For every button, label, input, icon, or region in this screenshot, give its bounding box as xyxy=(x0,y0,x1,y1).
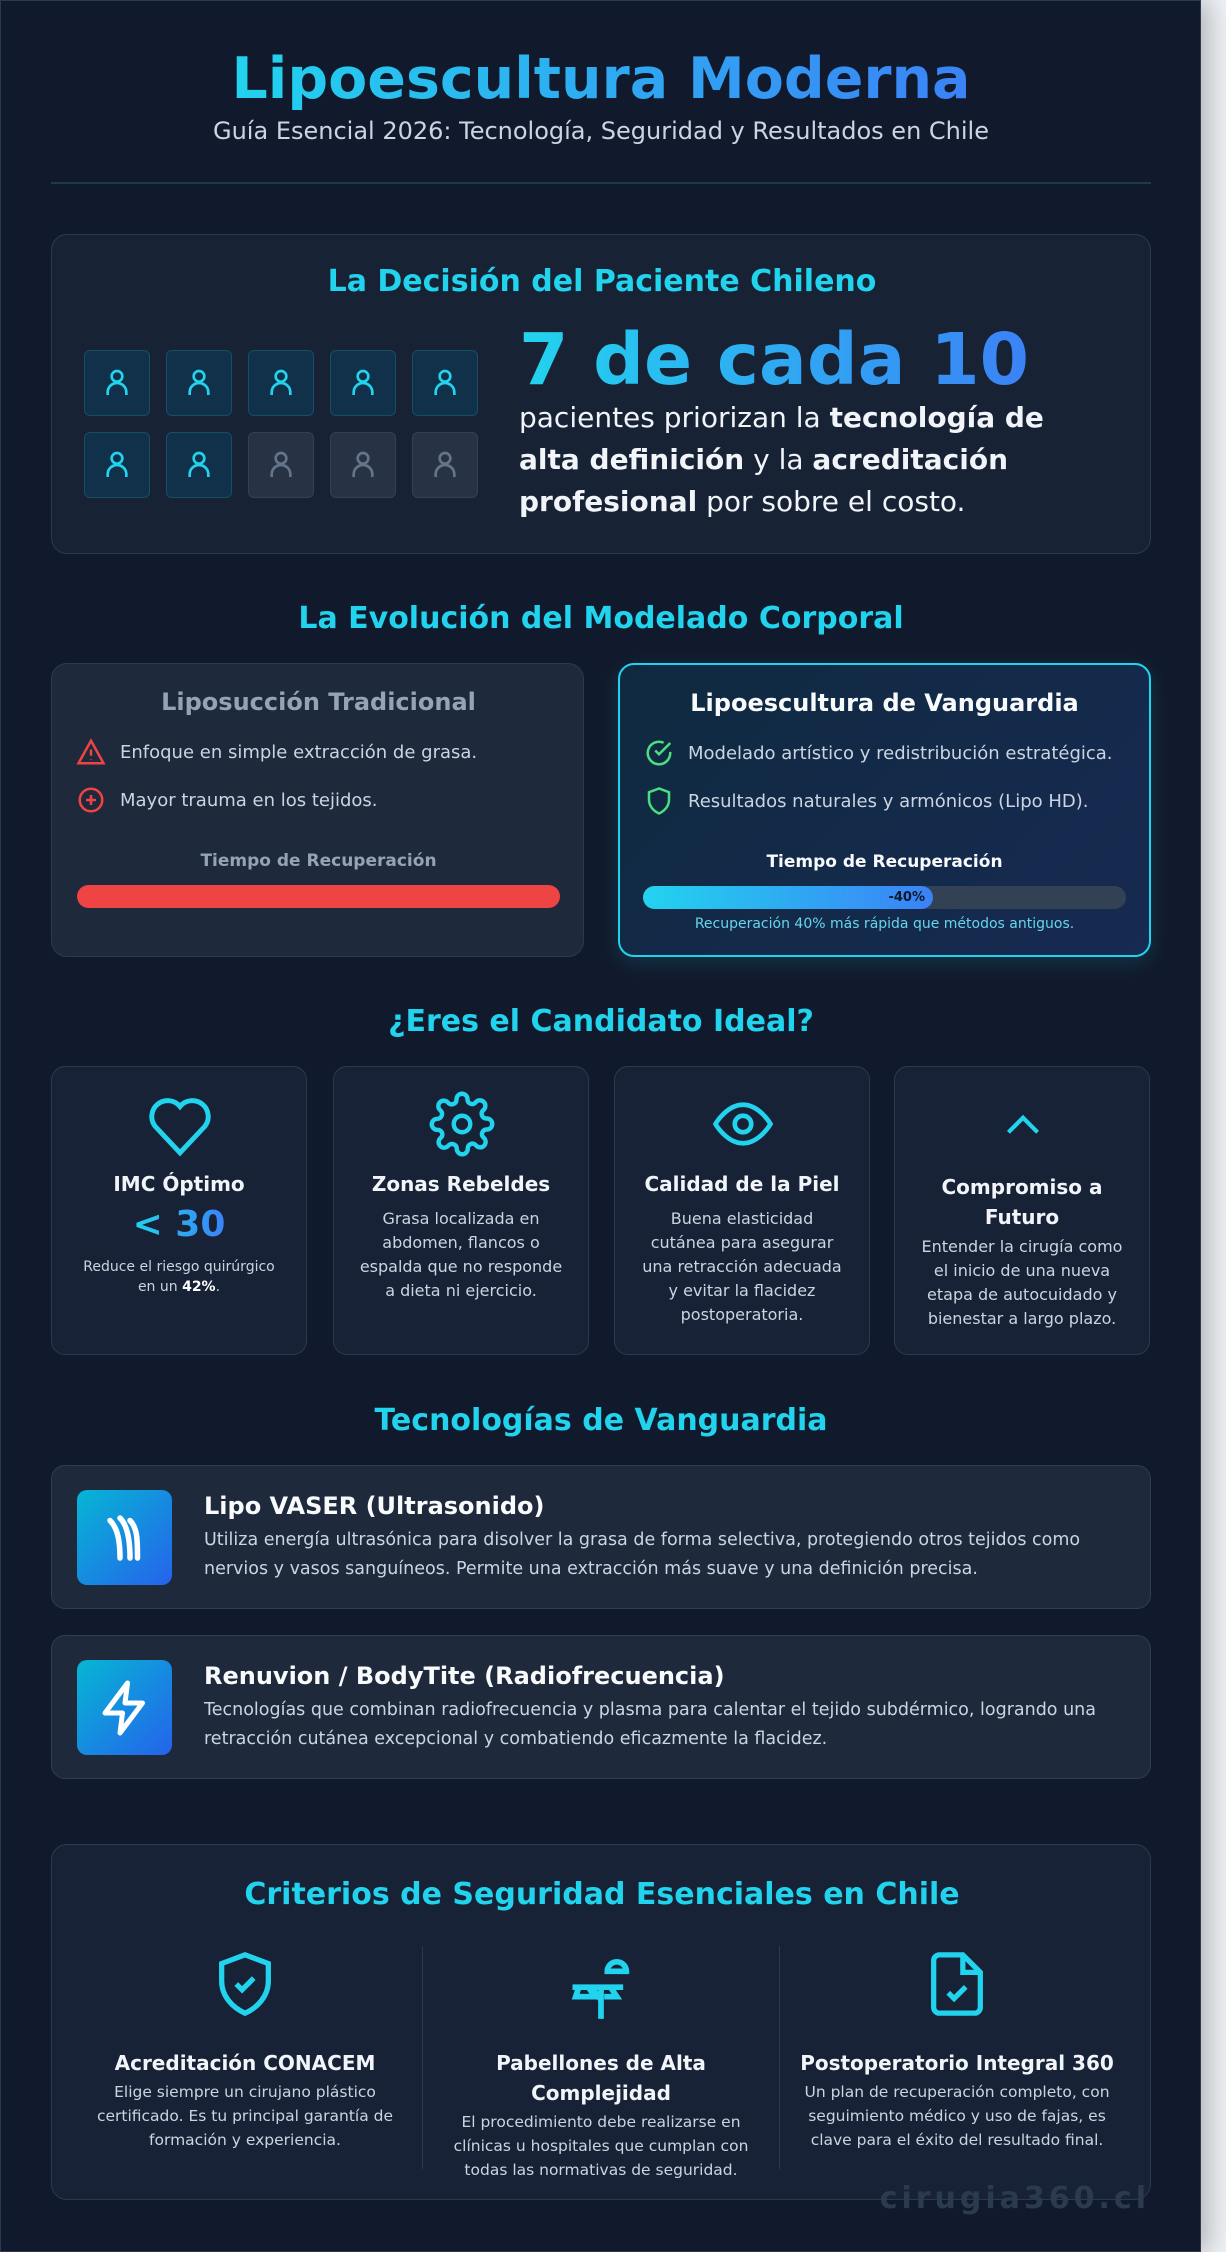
card: skin xyxy=(614,1066,870,1355)
tech card: Renuvion xyxy=(51,1635,1151,1779)
card: skin: Calidad de la Piel xyxy=(644,1172,840,1196)
heading: candidate: ¿Eres el Candidato Ideal? xyxy=(388,1004,814,1039)
heading: technologies: Tecnologías de Vanguardia xyxy=(374,1403,828,1438)
tech card: Renuvion: Renuvion / BodyTite (Radiofrecuencia) xyxy=(204,1662,725,1690)
card title: Lipoescultura de Vanguardia xyxy=(690,689,1079,717)
icon: heart xyxy=(149,1098,211,1156)
column: postoperatorio: Un plan de recuperación completo, con seguimiento médico y uso de fajas, es clave para el éxito del resultado final. xyxy=(804,2083,1110,2149)
icon: document check xyxy=(931,1952,983,2016)
card: commitment: Compromiso a Futuro xyxy=(942,1175,1102,1229)
panel: decision xyxy=(51,234,1151,554)
icon: gear xyxy=(430,1092,494,1156)
item: trauma: Mayor trauma en los tejidos. xyxy=(120,790,378,810)
card title: Liposucción Tradicional xyxy=(161,688,476,716)
column: CONACEM: Elige siempre un cirujano plástico certificado. Es tu principal garantía de formación y experiencia. xyxy=(97,2083,393,2149)
card: IMC: Reduce el riesgo quirúrgico en un 42%. xyxy=(83,1259,275,1295)
card: IMC xyxy=(51,1066,307,1355)
column: CONACEM xyxy=(97,1952,393,2149)
card: zones: Grasa localizada en abdomen, flancos o espalda que no responde a dieta ni ejercicio. xyxy=(360,1209,562,1300)
tech card: VASER: Utiliza energía ultrasónica para disolver la grasa de forma selectiva, protegiendo otros tejidos como nervios y vasos sanguíneos. Permite una extracción más suave y una definición precisa. xyxy=(204,1530,1080,1579)
stat text: pacientes priorizan la tecnología de alta definición y la acreditación profesional por sobre el costo. xyxy=(519,401,1044,518)
icon: surgical lamp xyxy=(572,1959,630,2019)
bar: -40% xyxy=(643,886,1126,909)
card: zones: Zonas Rebeldes xyxy=(372,1172,550,1196)
big stat: 7 de cada 10 xyxy=(519,318,1029,401)
column: postoperatorio xyxy=(800,1952,1114,2149)
title: Lipoescultura Moderna xyxy=(231,46,971,112)
icon: eye xyxy=(712,1102,774,1146)
panel: traditional xyxy=(51,663,584,957)
panel: vanguard xyxy=(618,663,1151,957)
tech card: VASER xyxy=(51,1465,1151,1609)
subtitle: Guía Esencial 2026: Tecnología, Seguridad y Resultados en Chile xyxy=(213,117,989,145)
heading: evolution: La Evolución del Modelado Corporal xyxy=(298,601,904,636)
column: pabellones: El procedimiento debe realizarse en clínicas u hospitales que cumplan con todas las normativas de seguridad. xyxy=(454,2113,748,2179)
icon: chevron up xyxy=(1007,1114,1039,1134)
heading: decision: La Decisión del Paciente Chileno xyxy=(328,264,876,299)
icon: shield check xyxy=(219,1952,271,2016)
item: modeling: Modelado artístico y redistribución estratégica. xyxy=(688,742,1113,764)
icon: lightning xyxy=(77,1660,172,1755)
column: postoperatorio: Postoperatorio Integral 360 xyxy=(800,2051,1114,2075)
column: CONACEM: Acreditación CONACEM xyxy=(115,2051,375,2075)
card: IMC: IMC Óptimo xyxy=(113,1172,245,1196)
icon: waves xyxy=(77,1490,172,1585)
icon grid: 7 of 10 xyxy=(84,350,478,498)
tech card: Renuvion: Tecnologías que combinan radiofrecuencia y plasma para calentar el tejido subdérmico, logrando una retracción cutánea excepcional y combatiendo eficazmente la flacidez. xyxy=(204,1700,1096,1749)
card: commitment xyxy=(894,1066,1150,1355)
item: fat extraction: Enfoque en simple extracción de grasa. xyxy=(120,742,477,762)
item: natural results xyxy=(648,787,1088,815)
card: zones xyxy=(333,1066,589,1355)
item: natural results: Resultados naturales y armónicos (Lipo HD). xyxy=(688,790,1088,812)
watermark: cirugia360.cl xyxy=(880,2181,1150,2216)
heading: safety: Criterios de Seguridad Esenciales en Chile xyxy=(244,1877,960,1912)
stat: < 30 xyxy=(133,1204,225,1245)
panel: safety xyxy=(51,1844,1151,2200)
tech card: VASER: Lipo VASER (Ultrasonido) xyxy=(204,1492,544,1520)
recovery label: Tiempo de Recuperación xyxy=(766,852,1003,872)
note: Recuperación 40% más rápida que métodos antiguos. xyxy=(695,916,1074,932)
column: pabellones: Pabellones de Alta Complejidad xyxy=(496,2051,706,2105)
card: commitment: Entender la cirugía como el inicio de una nueva etapa de autocuidado y bienestar a largo plazo. xyxy=(922,1237,1122,1328)
bar: -40%: -40% xyxy=(888,890,925,905)
card: skin: Buena elasticidad cutánea para asegurar una retracción adecuada y evitar la flacidez postoperatoria. xyxy=(642,1209,842,1324)
recovery label: Tiempo de Recuperación xyxy=(200,851,437,871)
column: pabellones xyxy=(454,1959,748,2179)
bar: full recovery xyxy=(77,885,560,908)
